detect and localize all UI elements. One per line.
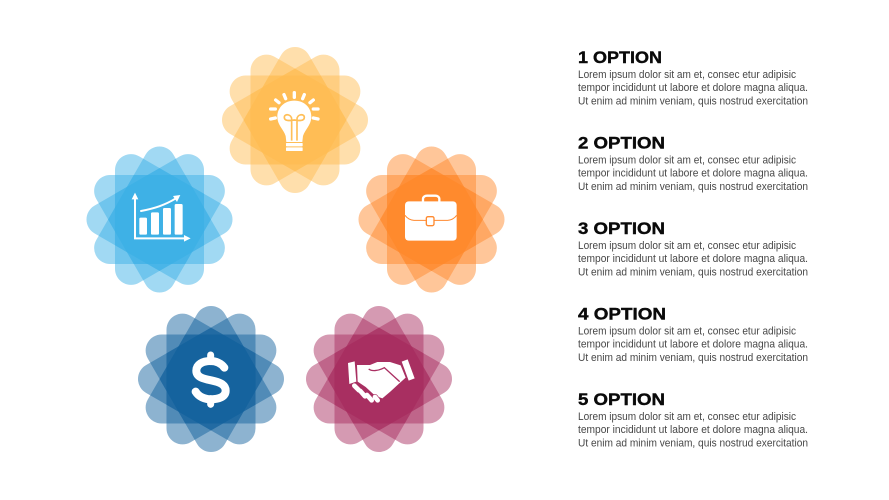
- text block: option 2: Lorem ipsum dolor sit am et, consec etur adipisic: [578, 154, 797, 166]
- text block: option 4: tempor incididunt ut labore et dolore magna aliqua.: [578, 338, 808, 350]
- icon: dollar sign: [196, 355, 226, 404]
- icon: briefcase: [405, 196, 457, 241]
- text block: option 4: 4 OPTION: [578, 304, 666, 324]
- text block: option 4: [578, 304, 808, 364]
- text block: option 1: Lorem ipsum dolor sit am et, consec etur adipisic: [578, 69, 797, 81]
- text block: option 3: 3 OPTION: [578, 219, 665, 238]
- text block: option 1: tempor incididunt ut labore et dolore magna aliqua.: [578, 82, 808, 94]
- text block: option 2: Ut enim ad minim veniam, quis nostrud exercitation: [578, 181, 808, 193]
- text block: option 3: [578, 219, 808, 278]
- text block: option 2: 2 OPTION: [578, 134, 665, 152]
- text block: option 3: Lorem ipsum dolor sit am et, consec etur adipisic: [578, 240, 797, 252]
- text block: option 5: 5 OPTION: [578, 390, 665, 409]
- text block: option 5: [578, 390, 808, 449]
- text block: option 4: Ut enim ad minim veniam, quis nostrud exercitation: [578, 352, 808, 364]
- text block: option 1: 1 OPTION: [578, 48, 662, 67]
- text block: option 4: Lorem ipsum dolor sit am et, consec etur adipisic: [578, 326, 797, 338]
- icon: light bulb: [271, 93, 318, 151]
- text block: option 3: tempor incididunt ut labore et dolore magna aliqua.: [578, 253, 808, 265]
- text block: option 2: [578, 134, 808, 193]
- icon: growth chart: [132, 193, 191, 242]
- flower: magenta handshake: [290, 290, 468, 468]
- text block: option 5: Ut enim ad minim veniam, quis nostrud exercitation: [578, 437, 808, 449]
- text block: option 1: Ut enim ad minim veniam, quis nostrud exercitation: [578, 95, 808, 107]
- flower: blue chart: [71, 131, 248, 308]
- text block: option 5: Lorem ipsum dolor sit am et, consec etur adipisic: [578, 411, 797, 423]
- flower: yellow idea: [206, 31, 384, 209]
- flower: navy dollar: [122, 290, 300, 468]
- text block: option 3: Ut enim ad minim veniam, quis nostrud exercitation: [578, 266, 808, 278]
- text block: option 5: tempor incididunt ut labore et dolore magna aliqua.: [578, 424, 808, 436]
- text block: option 1: [578, 48, 808, 107]
- flower: orange briefcase: [343, 131, 520, 308]
- text block: option 2: tempor incididunt ut labore et dolore magna aliqua.: [578, 168, 808, 180]
- icon: handshake: [348, 359, 415, 400]
